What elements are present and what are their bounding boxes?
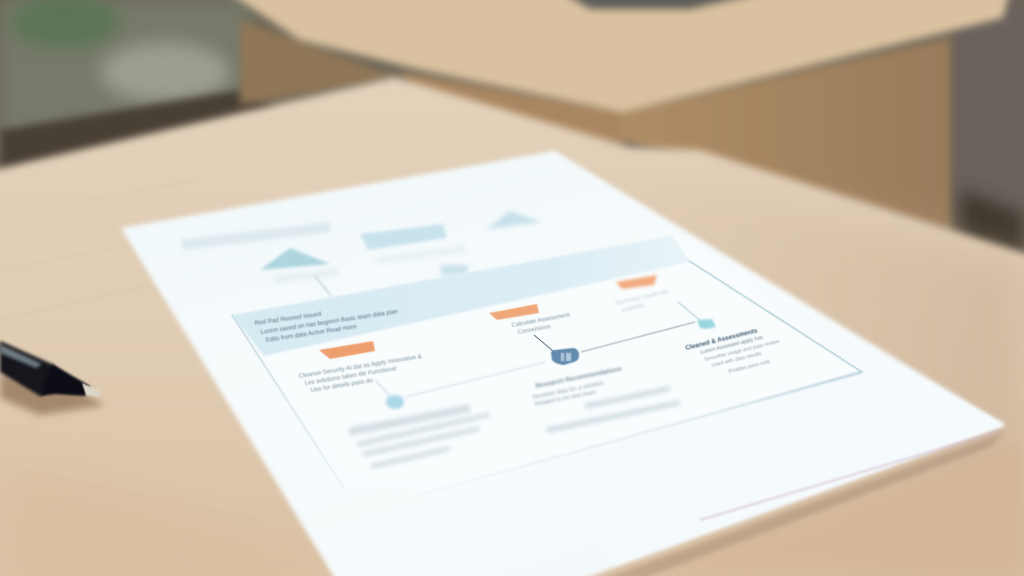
top blurred diagram <box>180 211 541 297</box>
header band text: Red Rad Reseed Issued <box>254 311 322 327</box>
caption under triangle <box>272 268 338 283</box>
step two text: Conversions <box>517 324 551 336</box>
centre step text: Research Recommendations <box>535 365 623 390</box>
step one text: Cleanse Security Al dat as Apply Innovative & <box>298 353 423 380</box>
pen <box>0 341 105 415</box>
right step body lines: Smoother usage and pass review <box>704 339 780 363</box>
header band text: Edits from data Active Read more <box>265 323 358 344</box>
background desk <box>225 0 1010 232</box>
icon: blue hexagon node <box>551 348 579 365</box>
wood tone shading <box>0 150 1024 576</box>
step two: orange ribbon <box>489 304 539 320</box>
icon: light blue circle node <box>386 395 404 409</box>
small blurred icon <box>441 265 468 277</box>
step one: orange ribbon <box>319 341 375 359</box>
right step body: Lorem Assessed apply has <box>700 335 764 356</box>
right step body lines <box>704 339 780 375</box>
main flowchart panel frame <box>232 238 862 495</box>
connectors <box>375 302 701 397</box>
header band <box>232 236 690 356</box>
right step text <box>685 327 764 356</box>
blurred background room <box>0 0 1024 270</box>
centre step text: Related to for test team <box>534 390 597 408</box>
right step body lines: Used with data results <box>711 351 762 369</box>
top heading strip <box>180 222 330 250</box>
step one text <box>298 353 423 394</box>
caption under rectangle <box>375 245 465 264</box>
paper shadow <box>600 432 1005 576</box>
lower left blurred text block <box>348 404 490 469</box>
icon: teal node <box>697 319 716 329</box>
paper sheet <box>121 151 1005 576</box>
step two text: Calculate Assessment <box>511 312 570 329</box>
step three text: Summary results list <box>615 289 669 307</box>
header band text: Lorem saved on has beginnn Basic team data plan <box>260 308 399 336</box>
step one text: Les solutions taken tile Functional <box>304 365 397 387</box>
right step body lines: Enables pass note <box>728 359 771 375</box>
connector from triangle <box>315 276 332 297</box>
rectangle shape centre <box>360 224 447 250</box>
triangle shape right <box>487 211 541 229</box>
step two text <box>511 312 570 336</box>
centre step text: Reviews data for a solution <box>532 381 604 401</box>
step three: orange ribbon <box>616 275 657 289</box>
step one text: Use for details pass do <box>310 377 374 394</box>
centre step lower lines <box>545 386 680 433</box>
step three text: available <box>621 303 646 314</box>
triangle shape left <box>260 248 330 270</box>
centre step text <box>532 365 623 408</box>
right step heading: Cleaned & Assessments <box>685 327 759 352</box>
